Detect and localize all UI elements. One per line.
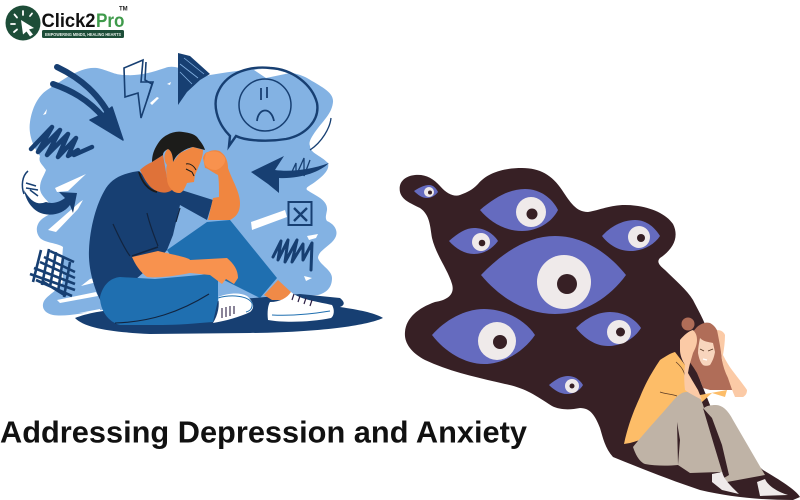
logo: Click2Pro [6,6,128,40]
shirt [624,352,727,444]
shoe left [213,293,253,323]
illustration: sad man on blue background [22,53,383,334]
title: Addressing Depression and Anxiety [0,416,527,450]
eye: large centre [481,236,626,314]
hair [682,318,735,390]
illustration: dark blob with watching eyes [400,168,800,500]
icon: lightning bolt [124,60,153,118]
white brush marks [43,69,330,313]
right arm [717,330,747,397]
eye: lower right [576,312,641,346]
face [698,338,715,366]
eye: left small [449,228,498,254]
eye: right [602,220,660,251]
icon: lower right scribble [273,240,312,270]
face [164,147,203,193]
logo: Click2Pro: Click2 [42,10,96,32]
icon: hatched scribble [30,249,75,297]
back leg [167,220,277,298]
icon: crossed box [288,202,312,225]
socks [712,472,788,496]
neck [140,155,172,193]
ankle [264,280,292,300]
icon: big swooping arrow [53,67,123,140]
shoe right [268,292,334,322]
icon: left scribble [31,127,92,157]
hair [152,132,205,162]
resting arm [132,251,238,284]
eye: top [480,189,558,231]
blue background blob [30,67,337,316]
icon: left arrow with scribble [251,118,331,193]
eye: lower left [432,309,535,364]
illustration: anxious woman [624,318,788,496]
dark blob [400,168,800,500]
left arm and hand [680,330,702,400]
front leg [100,273,218,325]
icon: speech bubble with sad face [216,68,317,146]
icon: curved arrow [22,171,77,215]
logo: Click2Pro: EMPOWERING MINDS, HEALING HEARTS [45,32,121,37]
eye: tiny [414,185,438,198]
ground shadow [75,294,383,334]
icon: top scribble [178,53,210,105]
torso [89,171,213,305]
logo: Click2Pro: Pro [96,10,125,32]
eye: bottom [549,376,583,394]
logo: Click2Pro: TM [119,6,128,12]
man [89,132,334,325]
leg shadow [677,408,729,478]
raised arm and fist [203,150,240,220]
pants [633,392,765,482]
